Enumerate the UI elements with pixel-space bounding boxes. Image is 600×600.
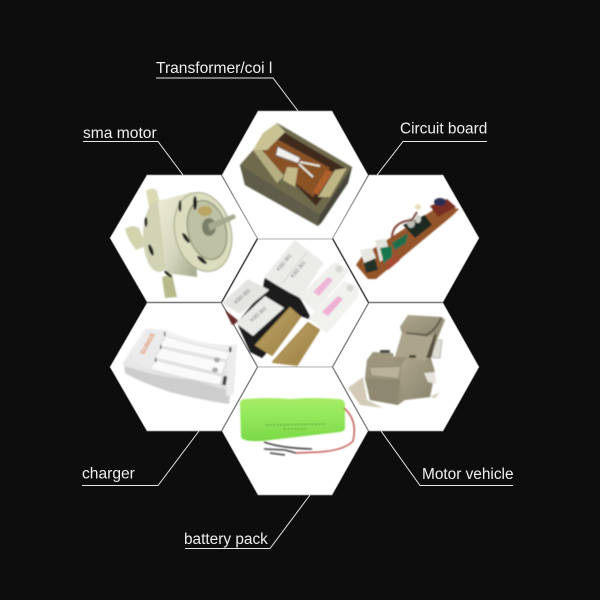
label: charger bbox=[82, 431, 199, 486]
leader line: Motor vehicle bbox=[381, 431, 513, 486]
hexagon: upper left bbox=[110, 175, 257, 302]
leader line: Transformer/coil bbox=[156, 78, 298, 111]
image: circuit board bbox=[356, 198, 459, 279]
image: thermal protectors bbox=[223, 241, 358, 365]
image: battery charger bbox=[123, 328, 237, 404]
protector: white top pair: KSD 301 bbox=[290, 260, 308, 279]
label: battery pack: battery pack bbox=[184, 531, 268, 548]
protector: gold pair bbox=[256, 308, 319, 365]
hexagon: centre bbox=[222, 239, 368, 367]
leader line: battery pack bbox=[185, 495, 310, 548]
protector: white left pair: KSD 301 bbox=[249, 305, 268, 323]
protector: white top pair: KSD 301 bbox=[276, 253, 294, 272]
image: transformer bbox=[240, 123, 352, 226]
label: Circuit board: Circuit board bbox=[400, 120, 487, 138]
label: Motor vehicle: Motor vehicle bbox=[422, 466, 514, 483]
image: battery pack bbox=[240, 398, 354, 455]
protector: white left pair bbox=[223, 280, 283, 335]
hexagon: bottom bbox=[222, 367, 368, 495]
label: small motor bbox=[83, 125, 183, 175]
hexagon cluster bbox=[110, 111, 479, 495]
label: charger: charger bbox=[82, 466, 135, 482]
label: small motor: sma motor bbox=[83, 125, 157, 142]
hexagon: lower left bbox=[110, 303, 257, 431]
leader line: charger bbox=[82, 431, 199, 486]
label: battery pack bbox=[184, 495, 310, 548]
label: Transformer/coil: Transformer/coi l bbox=[156, 60, 272, 77]
protector: white top pair bbox=[265, 241, 323, 297]
battery wires bbox=[264, 408, 354, 455]
leader line: small motor bbox=[83, 142, 183, 175]
label: Circuit board bbox=[377, 120, 487, 175]
image: massage chair bbox=[348, 315, 445, 408]
hexagon: top bbox=[222, 111, 368, 239]
protector: pink label pair bbox=[300, 263, 358, 332]
image: small motor bbox=[125, 186, 240, 298]
hexagon: upper right bbox=[333, 175, 479, 302]
label: Transformer/coil bbox=[156, 60, 298, 111]
protector: white left pair: KSD 301 bbox=[233, 287, 252, 305]
label: Motor vehicle bbox=[381, 431, 514, 486]
leader line: Circuit board bbox=[377, 142, 487, 175]
brand mark: SUNGS bbox=[140, 332, 157, 356]
hexagon: lower right bbox=[333, 303, 479, 431]
